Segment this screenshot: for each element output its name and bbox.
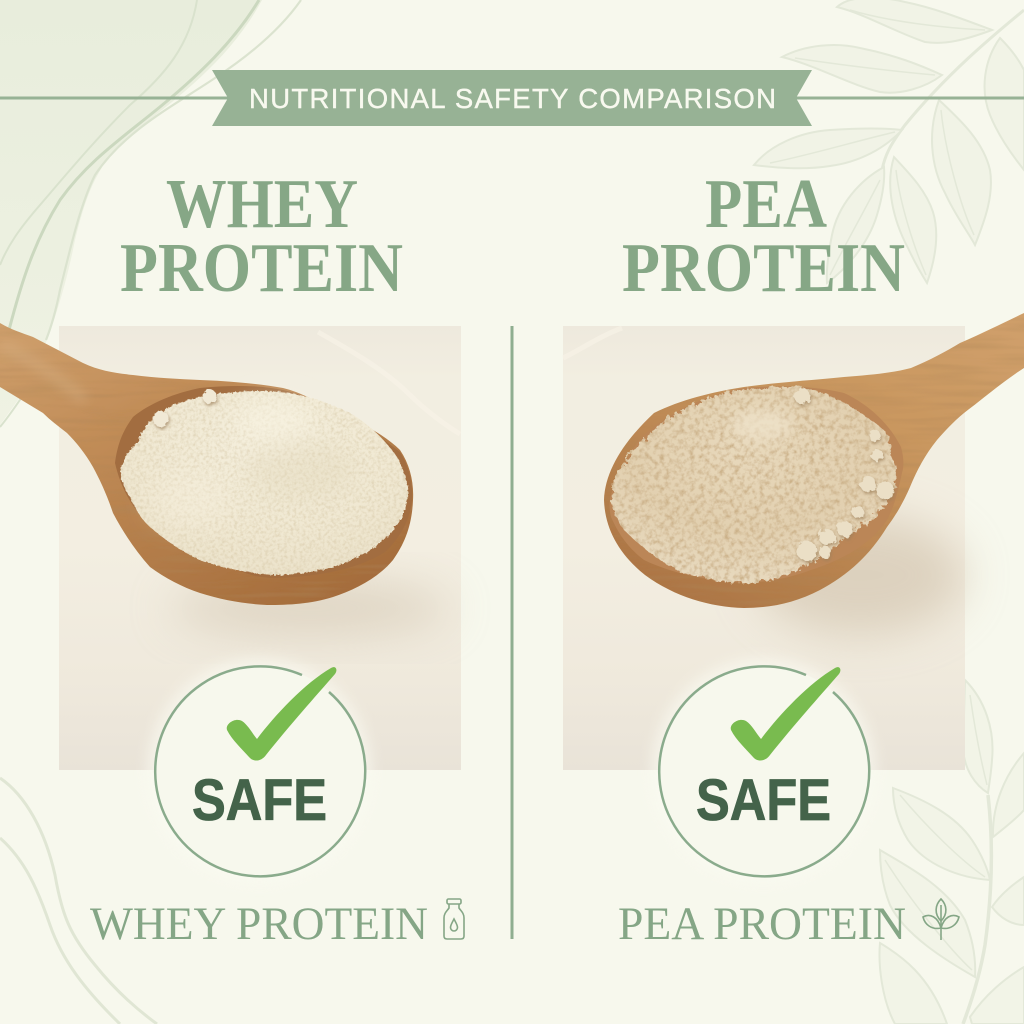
powder clumps: whey [153,390,217,427]
label: pea protein: PEA PROTEIN [618,898,906,950]
wooden spoon: pea [604,313,1024,608]
decoration: bottom-right leaf branch [880,680,1024,1024]
heading: pea protein [622,166,905,307]
panel: whey photo backdrop [59,326,461,770]
icon: milk bottle [444,899,464,939]
safe badge: whey: SAFE [192,768,327,833]
centre divider [510,326,514,939]
icon: sprout [923,899,959,940]
decoration: top-left curved shape and lines [0,0,301,427]
safe badge: pea [650,658,876,884]
heading: pea protein: PEA [705,166,827,243]
icon: check mark [731,667,840,761]
banner title [0,70,1024,126]
powder: whey [120,391,408,575]
powder clumps: pea [794,388,894,561]
powder: pea [612,387,897,583]
decoration: top-right leaf branch [754,0,1024,283]
safe badge: whey [146,658,372,884]
safe badge: pea: SAFE [696,768,831,833]
icon: check mark [227,667,336,761]
heading: whey protein [120,166,403,307]
whey spoon with powder [0,323,413,605]
heading: pea protein: PROTEIN [622,230,905,307]
powder shading: whey [150,398,355,528]
label: whey protein: WHEY PROTEIN [90,898,428,950]
pea spoon with powder [604,313,1024,608]
heading: whey protein: WHEY [166,166,358,243]
wooden spoon: whey [0,323,413,605]
heading: whey protein: PROTEIN [120,230,403,307]
decoration: bottom-left lines [0,778,157,1024]
panel: pea photo backdrop [563,326,965,770]
banner title: NUTRITIONAL SAFETY COMPARISON [249,83,776,114]
